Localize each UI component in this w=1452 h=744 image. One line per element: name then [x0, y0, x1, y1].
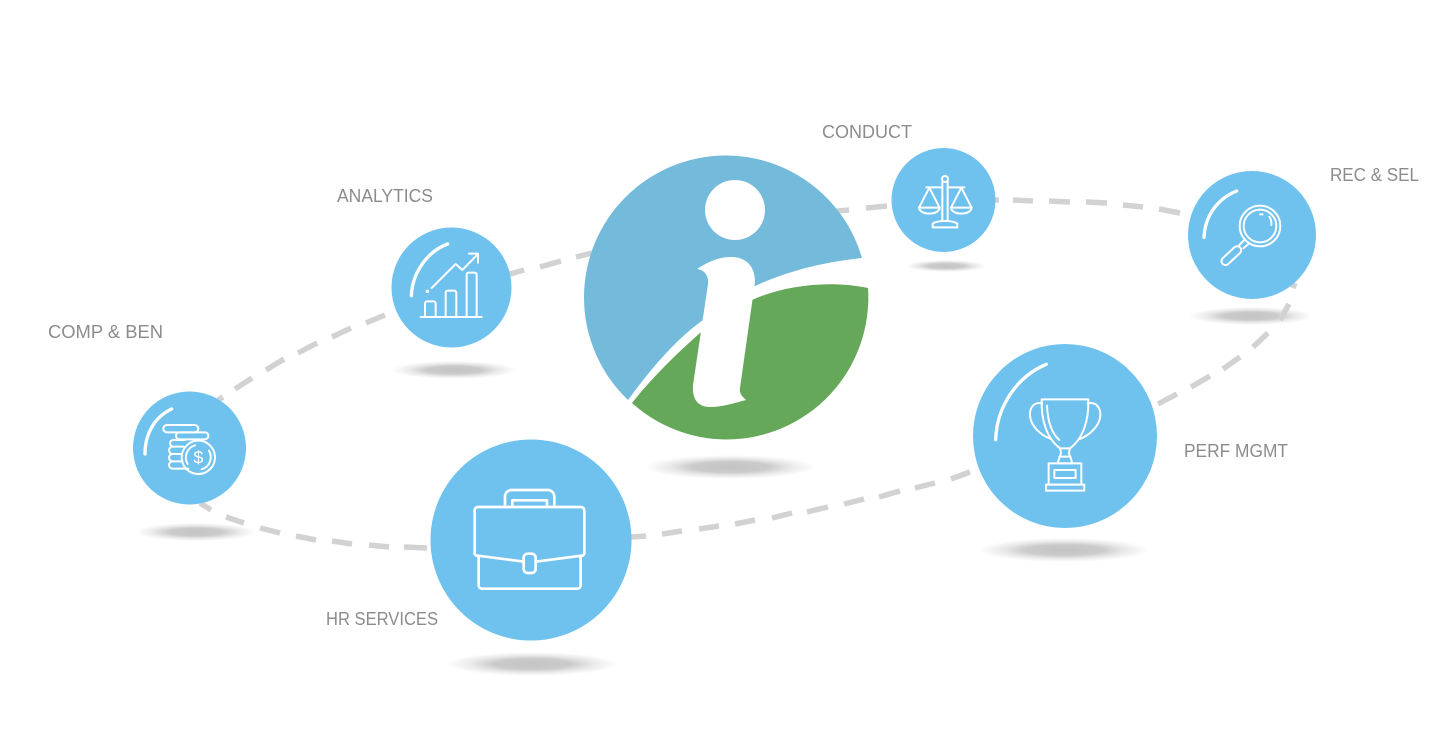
circle [430, 440, 632, 640]
shadow: analytics [392, 361, 516, 379]
circle [973, 344, 1157, 528]
shadow: conduct [906, 260, 986, 272]
node: analytics [392, 228, 512, 348]
circle [1188, 171, 1316, 299]
shadow: perf mgmt [979, 538, 1149, 562]
icon: growth chart [411, 244, 482, 317]
shadow: rec and sel [1189, 307, 1313, 325]
node: hr services [430, 440, 632, 640]
dashed orbit path [200, 200, 1295, 548]
node: comp and ben [133, 392, 246, 504]
label: comp and ben: COMP & BEN [48, 322, 163, 342]
logo green segment [632, 284, 868, 440]
node: perf mgmt [973, 344, 1157, 528]
node: rec and sel [1188, 171, 1316, 299]
label: analytics: ANALYTICS [337, 186, 433, 206]
node: conduct [892, 148, 996, 252]
icon: scales [919, 176, 972, 227]
label: hr services: HR SERVICES [326, 609, 438, 629]
shadow: hr services [447, 652, 617, 676]
icon: coins: $ [193, 448, 203, 468]
central i logo [584, 156, 868, 440]
icon: magnifying glass [1204, 191, 1280, 267]
shadow: logo [645, 455, 815, 479]
logo blue segment [584, 156, 862, 400]
label: perf mgmt: PERF MGMT [1184, 441, 1288, 461]
logo letter i stem [693, 257, 755, 407]
circle [133, 392, 246, 504]
circle [392, 228, 512, 348]
label: rec and sel: REC & SEL [1330, 165, 1419, 185]
icon: trophy [996, 364, 1100, 491]
shadow: comp and ben [136, 523, 256, 541]
logo letter i dot [705, 180, 765, 240]
icon: briefcase [475, 490, 584, 589]
label: conduct: CONDUCT [822, 122, 912, 142]
circle [892, 148, 996, 252]
